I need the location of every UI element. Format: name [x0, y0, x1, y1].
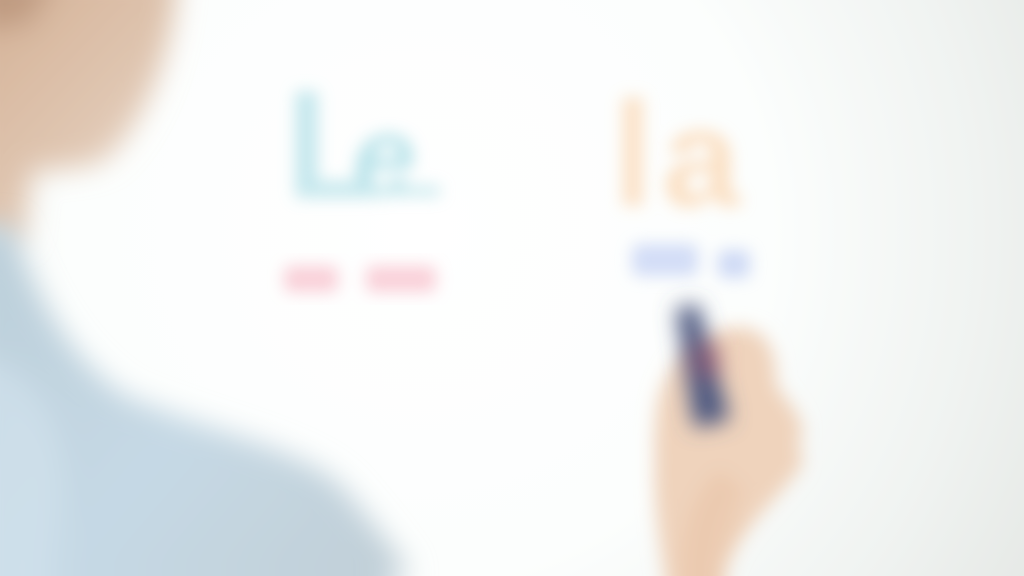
- writing: orange letters: a: [662, 79, 741, 236]
- writing: orange letters: [612, 70, 741, 238]
- person: shirt: [0, 225, 412, 576]
- writing: teal letters: [285, 58, 440, 231]
- writing: blue line: [632, 244, 750, 278]
- person: head and neck: [0, 0, 178, 240]
- writing: teal letters: e: [352, 93, 416, 221]
- icon: marker pen: [676, 304, 730, 428]
- writing: teal letters: L: [285, 58, 380, 231]
- writing: pink line: [284, 266, 436, 292]
- hand and forearm: [654, 327, 802, 576]
- writing: orange letters: l: [612, 70, 654, 238]
